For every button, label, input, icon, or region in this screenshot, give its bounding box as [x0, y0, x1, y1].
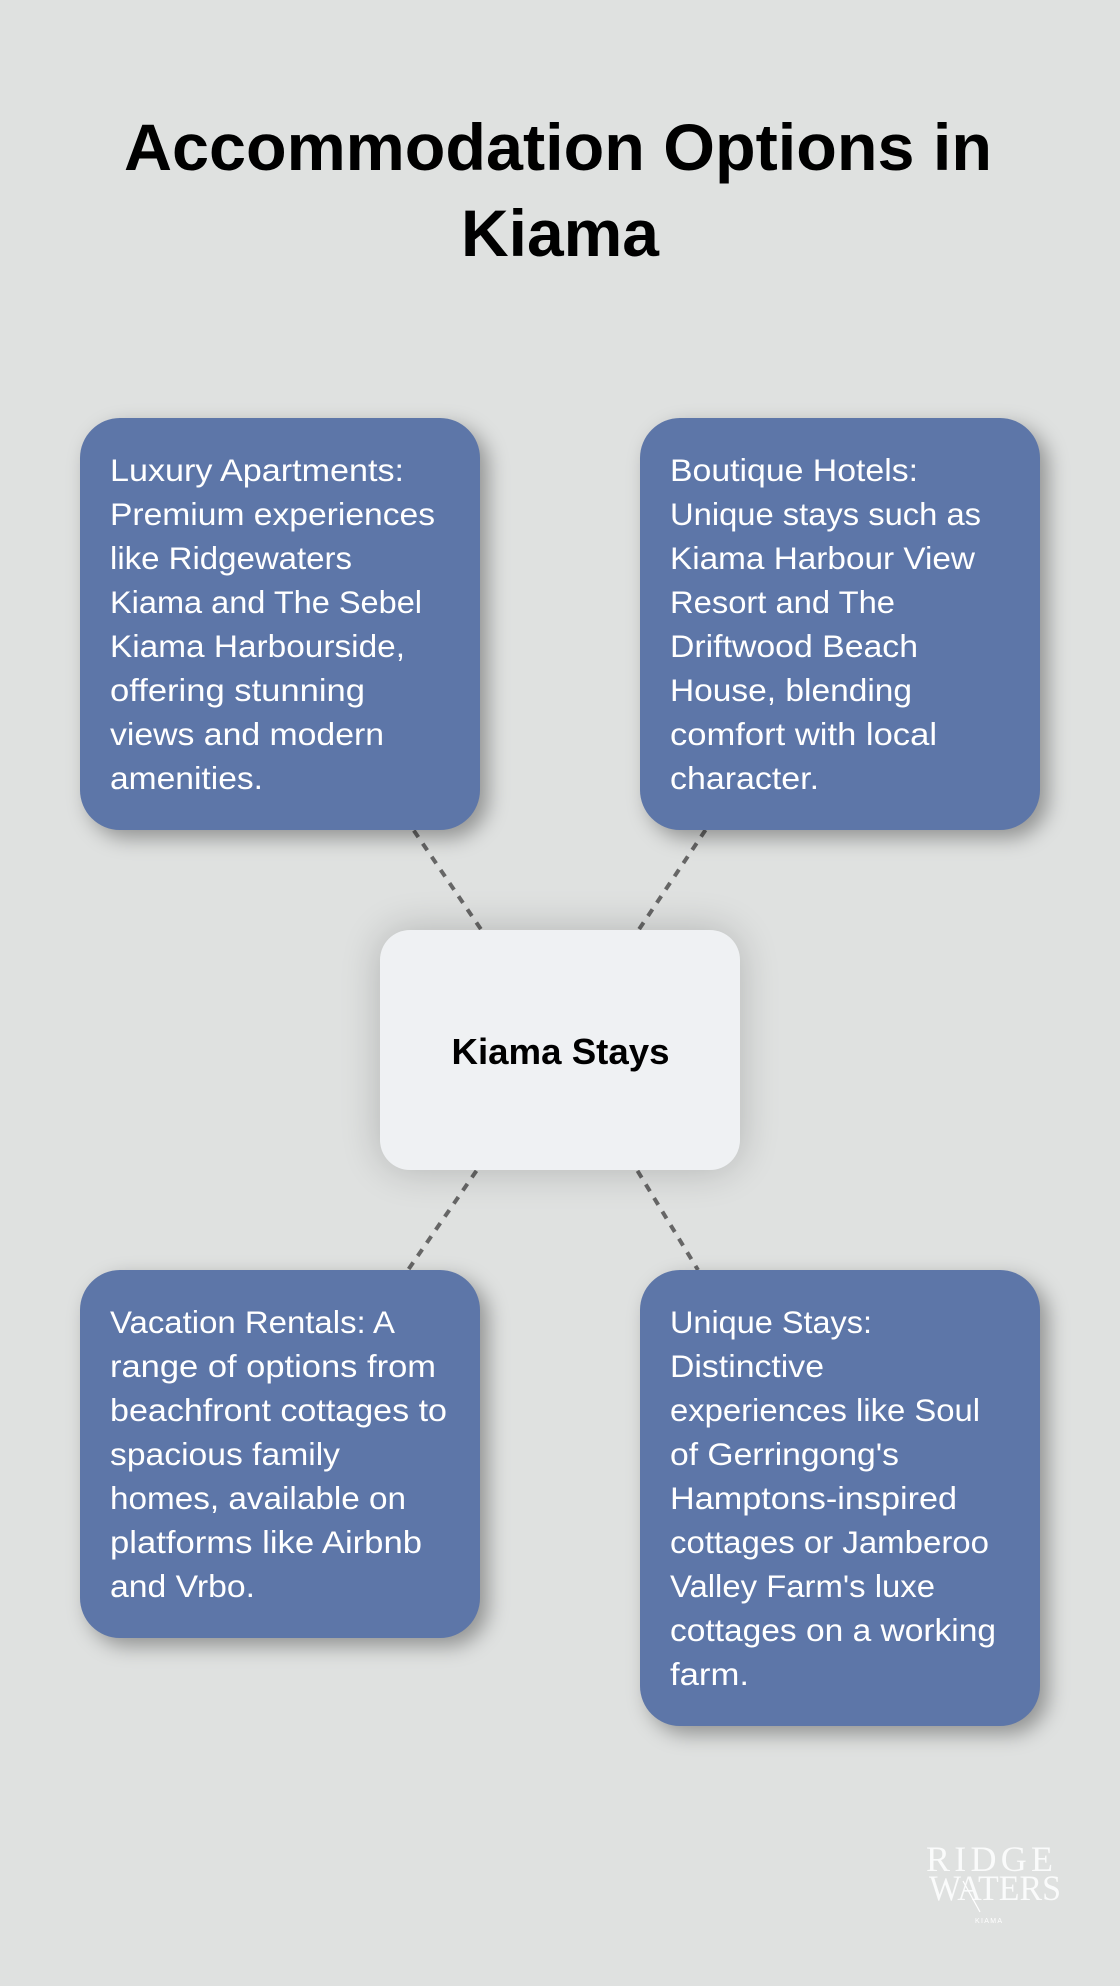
- panel: vacation rentals: beachfront cottages to: [110, 1392, 447, 1428]
- panel: vacation rentals: homes, available on: [110, 1480, 406, 1516]
- panel: luxury apartments: Kiama Harbourside,: [110, 628, 405, 664]
- panel: boutique hotels: comfort with local: [670, 716, 937, 752]
- panel: unique stays: farm.: [670, 1656, 749, 1692]
- panel: luxury apartments: views and modern: [110, 716, 384, 752]
- center label: Kiama Stays: [452, 1031, 670, 1072]
- title: Kiama: [461, 196, 660, 270]
- logo: Ridge Waters Kiama: [926, 1839, 1061, 1925]
- panel: unique stays: Hamptons-inspired: [670, 1480, 957, 1516]
- panel: vacation rentals: and Vrbo.: [110, 1568, 255, 1604]
- panel: boutique hotels: Driftwood Beach: [670, 628, 918, 664]
- logo: Ridge Waters Kiama: KIAMA: [975, 1918, 1002, 1925]
- panel: boutique hotels: Boutique Hotels:: [670, 452, 918, 488]
- logo: Ridge Waters Kiama: RIDGE: [926, 1839, 1053, 1879]
- panel: boutique hotels: [640, 418, 1040, 830]
- panel: luxury apartments: amenities.: [110, 760, 263, 796]
- panel: boutique hotels: Resort and The: [670, 584, 895, 620]
- panel: unique stays: Valley Farm's luxe: [670, 1568, 935, 1604]
- panel: luxury apartments: Kiama and The Sebel: [110, 584, 422, 620]
- title: Accommodation Options in: [124, 110, 992, 184]
- logo: Ridge Waters Kiama: WATERS: [929, 1868, 1061, 1908]
- panel: boutique hotels: Kiama Harbour View: [670, 540, 975, 576]
- panel: unique stays: cottages or Jamberoo: [670, 1524, 989, 1560]
- panel: luxury apartments: like Ridgewaters: [110, 540, 352, 576]
- panel: luxury apartments: offering stunning: [110, 672, 365, 708]
- panel: vacation rentals: range of options from: [110, 1348, 436, 1384]
- panel: boutique hotels: House, blending: [670, 672, 912, 708]
- panel: unique stays: Distinctive: [670, 1348, 824, 1384]
- panel: vacation rentals: spacious family: [110, 1436, 340, 1472]
- panel: unique stays: Unique Stays:: [670, 1304, 872, 1340]
- panel: boutique hotels: character.: [670, 760, 819, 796]
- title: [124, 110, 992, 270]
- panel: vacation rentals: [80, 1270, 480, 1638]
- panel: unique stays: experiences like Soul: [670, 1392, 980, 1428]
- panel: center node: [380, 930, 740, 1170]
- panel: vacation rentals: Vacation Rentals: A: [110, 1304, 395, 1340]
- panel: unique stays: cottages on a working: [670, 1612, 996, 1648]
- panel: unique stays: [640, 1270, 1040, 1726]
- panel: luxury apartments: [80, 418, 480, 830]
- panel: luxury apartments: Premium experiences: [110, 496, 435, 532]
- panel: vacation rentals: platforms like Airbnb: [110, 1524, 422, 1560]
- panel: boutique hotels: Unique stays such as: [670, 496, 981, 532]
- panel: unique stays: of Gerringong's: [670, 1436, 899, 1472]
- panel: luxury apartments: Luxury Apartments:: [110, 452, 404, 488]
